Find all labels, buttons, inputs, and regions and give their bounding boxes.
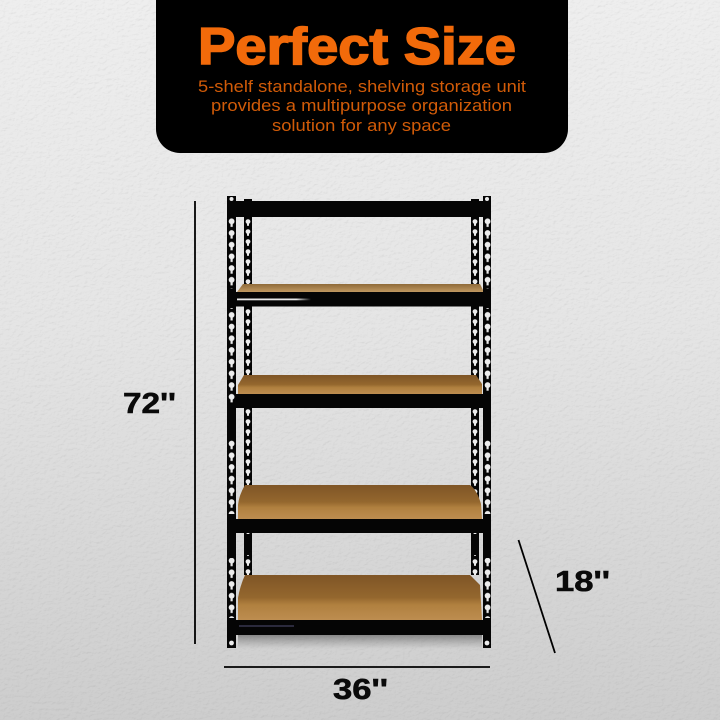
- header description: 5-shelf standalone, shelving storage unit: [198, 77, 526, 96]
- depth dimension line: [518, 540, 555, 653]
- shelf 4: [236, 575, 483, 635]
- header description: [198, 77, 526, 135]
- shelf 1: [236, 284, 484, 306]
- height dimension line: [194, 201, 196, 644]
- width label: 36'': [333, 674, 388, 706]
- header panel: [156, 0, 568, 153]
- rear posts: [244, 199, 479, 575]
- floor shadow: [238, 635, 482, 649]
- title: Perfect Size: [198, 18, 516, 76]
- width dimension line: [224, 666, 490, 668]
- shelf 2: [236, 375, 483, 408]
- shelf 3: [236, 485, 483, 533]
- header description: solution for any space: [272, 116, 451, 135]
- front left post: [227, 196, 236, 648]
- shelving unit: [227, 196, 492, 649]
- header description: provides a multipurpose organization: [211, 96, 512, 115]
- height label: 72'': [123, 388, 176, 420]
- front right post: [483, 196, 492, 648]
- top beam: [236, 201, 483, 217]
- depth label: 18'': [555, 566, 610, 598]
